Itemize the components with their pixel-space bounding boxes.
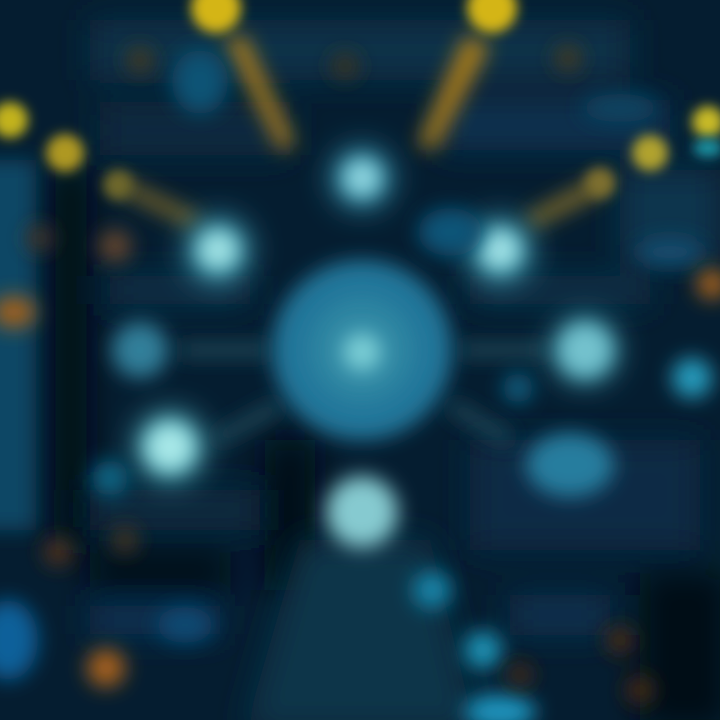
bottom center column <box>245 540 475 720</box>
left column <box>0 160 36 530</box>
beam: upper right <box>418 35 490 150</box>
beam: right <box>525 170 610 230</box>
beam: upper left <box>225 35 295 150</box>
bright nodes <box>112 159 611 548</box>
node halos <box>136 148 617 481</box>
spokes from hub <box>180 350 550 440</box>
central hub <box>272 260 452 440</box>
yellow nodes <box>0 0 720 200</box>
cyan glow below right yellow node <box>693 139 720 157</box>
beam: left <box>115 175 200 230</box>
